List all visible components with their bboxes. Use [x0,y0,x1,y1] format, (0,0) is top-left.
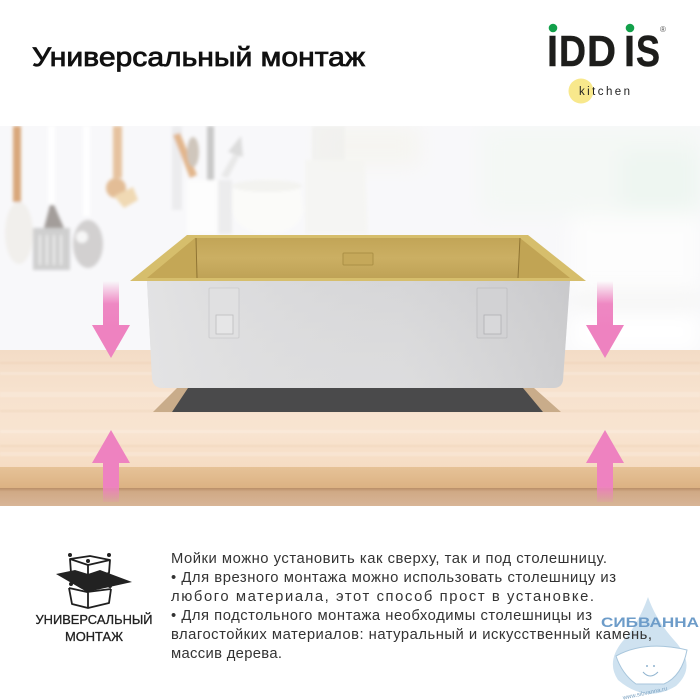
wood countertop [0,350,700,468]
overflow plate [343,253,373,265]
gold basin left wall [147,238,197,278]
title: Универсальный монтаж [32,42,365,72]
clip dots [68,553,112,591]
blurred utensils [6,126,315,272]
yellow circle [568,78,594,104]
icon label [36,612,152,644]
gold basin right wall [518,238,570,278]
chipboard right [522,388,561,412]
logo wordmark: I [547,28,558,76]
description text: влагостойких материалов: натуральный и искусственный камень, [171,627,652,643]
right clip [477,288,507,338]
body shading [147,281,570,388]
watermark: Sibvanna [613,597,687,700]
watermark drop [613,597,687,694]
countertop plane [56,570,132,592]
arrow: bottom right up [586,430,624,502]
logo: IDDIS kitchen [547,24,666,104]
basin corner lines [196,238,520,278]
kitchen label: kitchen [579,86,630,98]
left clip [209,288,239,338]
logo wordmark [547,28,660,76]
logo wordmark: D [559,28,586,76]
window background [348,139,690,200]
logo wordmark: D [587,28,616,76]
icon: universal mounting [56,553,132,608]
description text: • Для врезного монтажа можно использовать столешницу из [171,570,616,586]
watermark name: СИБВАННА [601,615,699,630]
icon label: МОНТАЖ [65,629,123,644]
arrow: top left down [92,281,130,358]
watermark bath [616,646,687,684]
registered mark: ® [660,25,666,34]
description text: любого материала, этот способ прост в установке. [171,589,594,605]
countertop front edge [0,467,700,488]
gold inner basin back wall [195,238,520,278]
lower sink [69,588,111,608]
photo: kitchen background with countertop [0,126,700,506]
icon label: УНИВЕРСАЛЬНЫЙ [36,612,152,627]
sink body [147,281,570,388]
chipboard left [153,388,190,412]
description text: Мойки можно установить как сверху, так и под столешницу. [171,551,607,567]
arrow: top right down [586,281,624,358]
countertop cut-out hole [153,388,561,412]
gold rim outer [130,235,586,281]
dark opening [172,388,543,412]
arrow: bottom left up [92,430,130,502]
logo wordmark: I [624,28,635,76]
logo wordmark: S [636,28,660,76]
sink [130,235,586,388]
upper sink [70,556,110,579]
description text: • Для подстольного монтажа необходимы столешницы из [171,608,592,624]
description text: массив дерева. [171,646,282,662]
logo green dots [549,24,634,32]
description text [171,551,652,662]
